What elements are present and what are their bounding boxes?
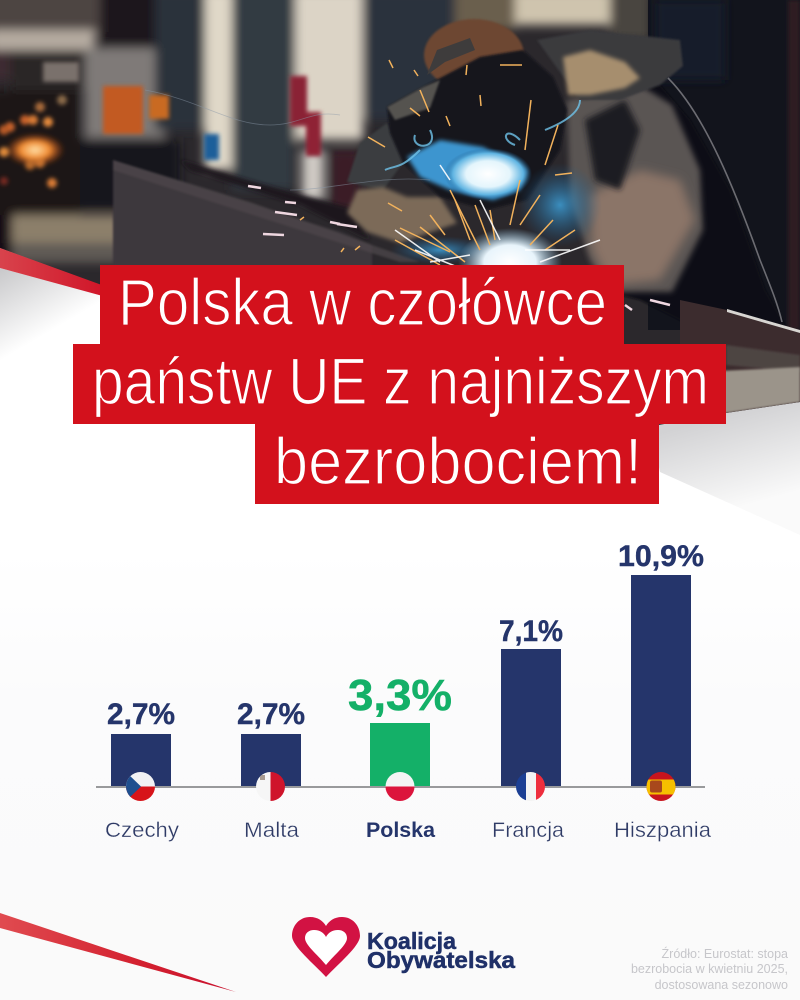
- head: [423, 18, 524, 80]
- logo text line 2: Obywatelska: [367, 947, 515, 973]
- photo: welder at work: [0, 0, 800, 440]
- shield glow: [407, 140, 527, 200]
- red stripe top left: [0, 248, 110, 298]
- bar chart: [96, 540, 711, 842]
- source note: [631, 946, 788, 992]
- title box line 2: [73, 344, 726, 424]
- source note: Źródło: Eurostat: stopa: [662, 946, 788, 961]
- flag: Polska: [385, 772, 415, 802]
- value: Czechy: 2,7%: [107, 698, 175, 731]
- flag: Malta: [256, 772, 286, 802]
- label: Malta: Malta: [244, 819, 299, 842]
- label: Francja: Francja: [492, 819, 564, 842]
- value: Polska: 3,3%: [348, 671, 452, 720]
- metal beam right: [680, 300, 800, 420]
- label: Czechy: Czechy: [105, 819, 180, 842]
- flag: Francja: [516, 772, 546, 802]
- label: Hiszpania: Hiszpania: [614, 819, 711, 842]
- bar: Francja: [501, 649, 561, 786]
- source note: bezrobocia w kwietniu 2025,: [631, 962, 788, 976]
- metal table: [113, 160, 420, 275]
- value: Hiszpania: 10,9%: [618, 540, 704, 573]
- welding shield: [387, 50, 567, 210]
- title line 1: Polska w czołówce: [118, 265, 607, 339]
- flag: Hiszpania: [646, 772, 676, 802]
- red stripe bottom left: [0, 913, 236, 992]
- left sleeve: [347, 123, 405, 190]
- bar: Hiszpania: [631, 575, 691, 786]
- title line 3: bezrobociem!: [274, 424, 642, 498]
- icon: heart: [292, 917, 360, 977]
- title box line 1: [100, 265, 624, 344]
- bar: Polska: [370, 723, 430, 786]
- dark background right: [648, 0, 800, 330]
- bar: Malta: [241, 734, 301, 786]
- title: [73, 265, 726, 504]
- logo text line 1: Koalicja: [367, 928, 456, 954]
- source note: dostosowana sezonowo: [655, 978, 788, 992]
- flag: Czechy: [126, 772, 156, 802]
- title line 2: państw UE z najniższym: [92, 344, 709, 418]
- logo: Koalicja Obywatelska: [292, 917, 515, 977]
- welding sparks burst: [459, 228, 561, 265]
- grey shadow left: [0, 268, 100, 360]
- bar: Czechy: [111, 734, 171, 786]
- value: Malta: 2,7%: [237, 698, 305, 731]
- title box line 3: [255, 424, 659, 504]
- welder body: [624, 86, 784, 323]
- grey shadow right: [650, 402, 800, 535]
- glove: [347, 187, 457, 243]
- value: Francja: 7,1%: [499, 615, 563, 648]
- label: Polska: Polska: [366, 819, 435, 842]
